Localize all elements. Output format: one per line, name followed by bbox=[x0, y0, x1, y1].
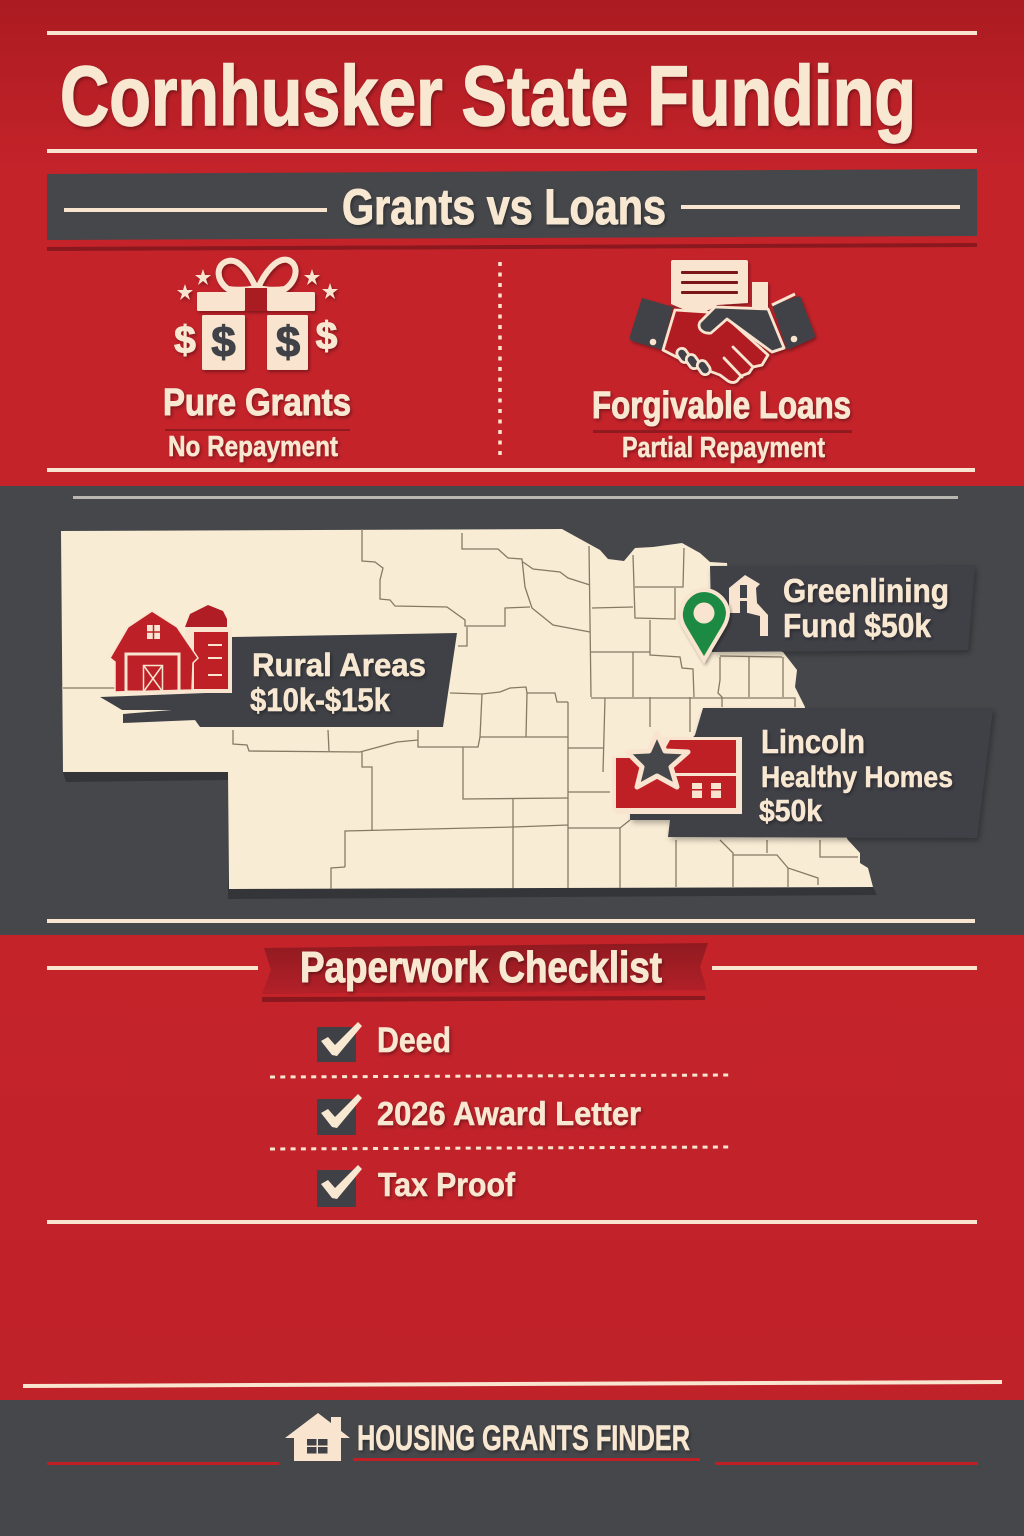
heading: pure grants: Pure Grants bbox=[163, 382, 351, 424]
label: greenlining: Greenlining bbox=[783, 572, 949, 609]
label: rural areas: Rural Areas bbox=[252, 647, 426, 683]
checklist item: tax proof bbox=[317, 1165, 516, 1207]
callout: lincoln healthy homes bbox=[612, 708, 993, 838]
footer text: HOUSING GRANTS FINDER bbox=[357, 1419, 690, 1458]
callout: rural areas bbox=[100, 605, 457, 727]
checklist item: deed bbox=[317, 1021, 451, 1062]
icon: red building with star bbox=[612, 733, 742, 814]
icon: red barn and silo bbox=[100, 605, 232, 697]
label: lincoln: Lincoln bbox=[761, 723, 865, 760]
panel: pure grants bbox=[163, 260, 351, 463]
panel: paperwork checklist bbox=[262, 943, 731, 1207]
icon: gift with dollars: $ bbox=[174, 319, 196, 362]
label: rural amount: $10k-$15k bbox=[250, 682, 390, 718]
heading: paperwork checklist: Paperwork Checklist bbox=[300, 943, 662, 992]
icon: gift with dollars: $ bbox=[276, 318, 300, 367]
icon: gift with dollars: $ bbox=[316, 315, 338, 358]
icon: house bbox=[285, 1413, 350, 1461]
checklist item: tax proof: Tax Proof bbox=[378, 1166, 516, 1203]
dark map section background bbox=[0, 486, 1024, 936]
checklist item: award letter: 2026 Award Letter bbox=[377, 1095, 641, 1132]
dark hand bbox=[699, 307, 784, 352]
text: partial repayment: Partial Repayment bbox=[622, 432, 825, 464]
icon: farm silhouette bbox=[729, 575, 768, 636]
panel: forgivable loans bbox=[592, 260, 852, 464]
icon: gift with dollars: $ bbox=[211, 318, 236, 367]
label: fund amount: Fund $50k bbox=[783, 607, 932, 644]
icon: gift with dollars bbox=[174, 260, 338, 370]
map outline bbox=[61, 529, 873, 889]
checklist item: award letter bbox=[317, 1094, 641, 1135]
heading: forgivable loans: Forgivable Loans bbox=[592, 385, 851, 427]
icon: handshake with document bbox=[630, 260, 815, 382]
dotted divider bbox=[498, 262, 502, 456]
banner bbox=[262, 943, 708, 1002]
text: no repayment: No Repayment bbox=[168, 431, 338, 463]
subtitle text: Grants vs Loans bbox=[342, 179, 666, 235]
map of Nebraska bbox=[61, 529, 877, 899]
dark footer background bbox=[0, 1400, 1024, 1536]
label: lincoln amount: $50k bbox=[759, 793, 823, 828]
checklist item: deed: Deed bbox=[377, 1021, 451, 1060]
red hand bbox=[663, 310, 768, 382]
label: healthy homes: Healthy Homes bbox=[761, 761, 953, 794]
red checklist section background bbox=[0, 935, 1024, 1401]
red background bbox=[0, 0, 1024, 486]
callout: greenlining fund bbox=[681, 565, 975, 660]
subtitle band bbox=[47, 169, 977, 251]
county lines bbox=[63, 529, 858, 889]
footer bbox=[47, 1413, 978, 1465]
icon: green map pin bbox=[681, 590, 728, 660]
